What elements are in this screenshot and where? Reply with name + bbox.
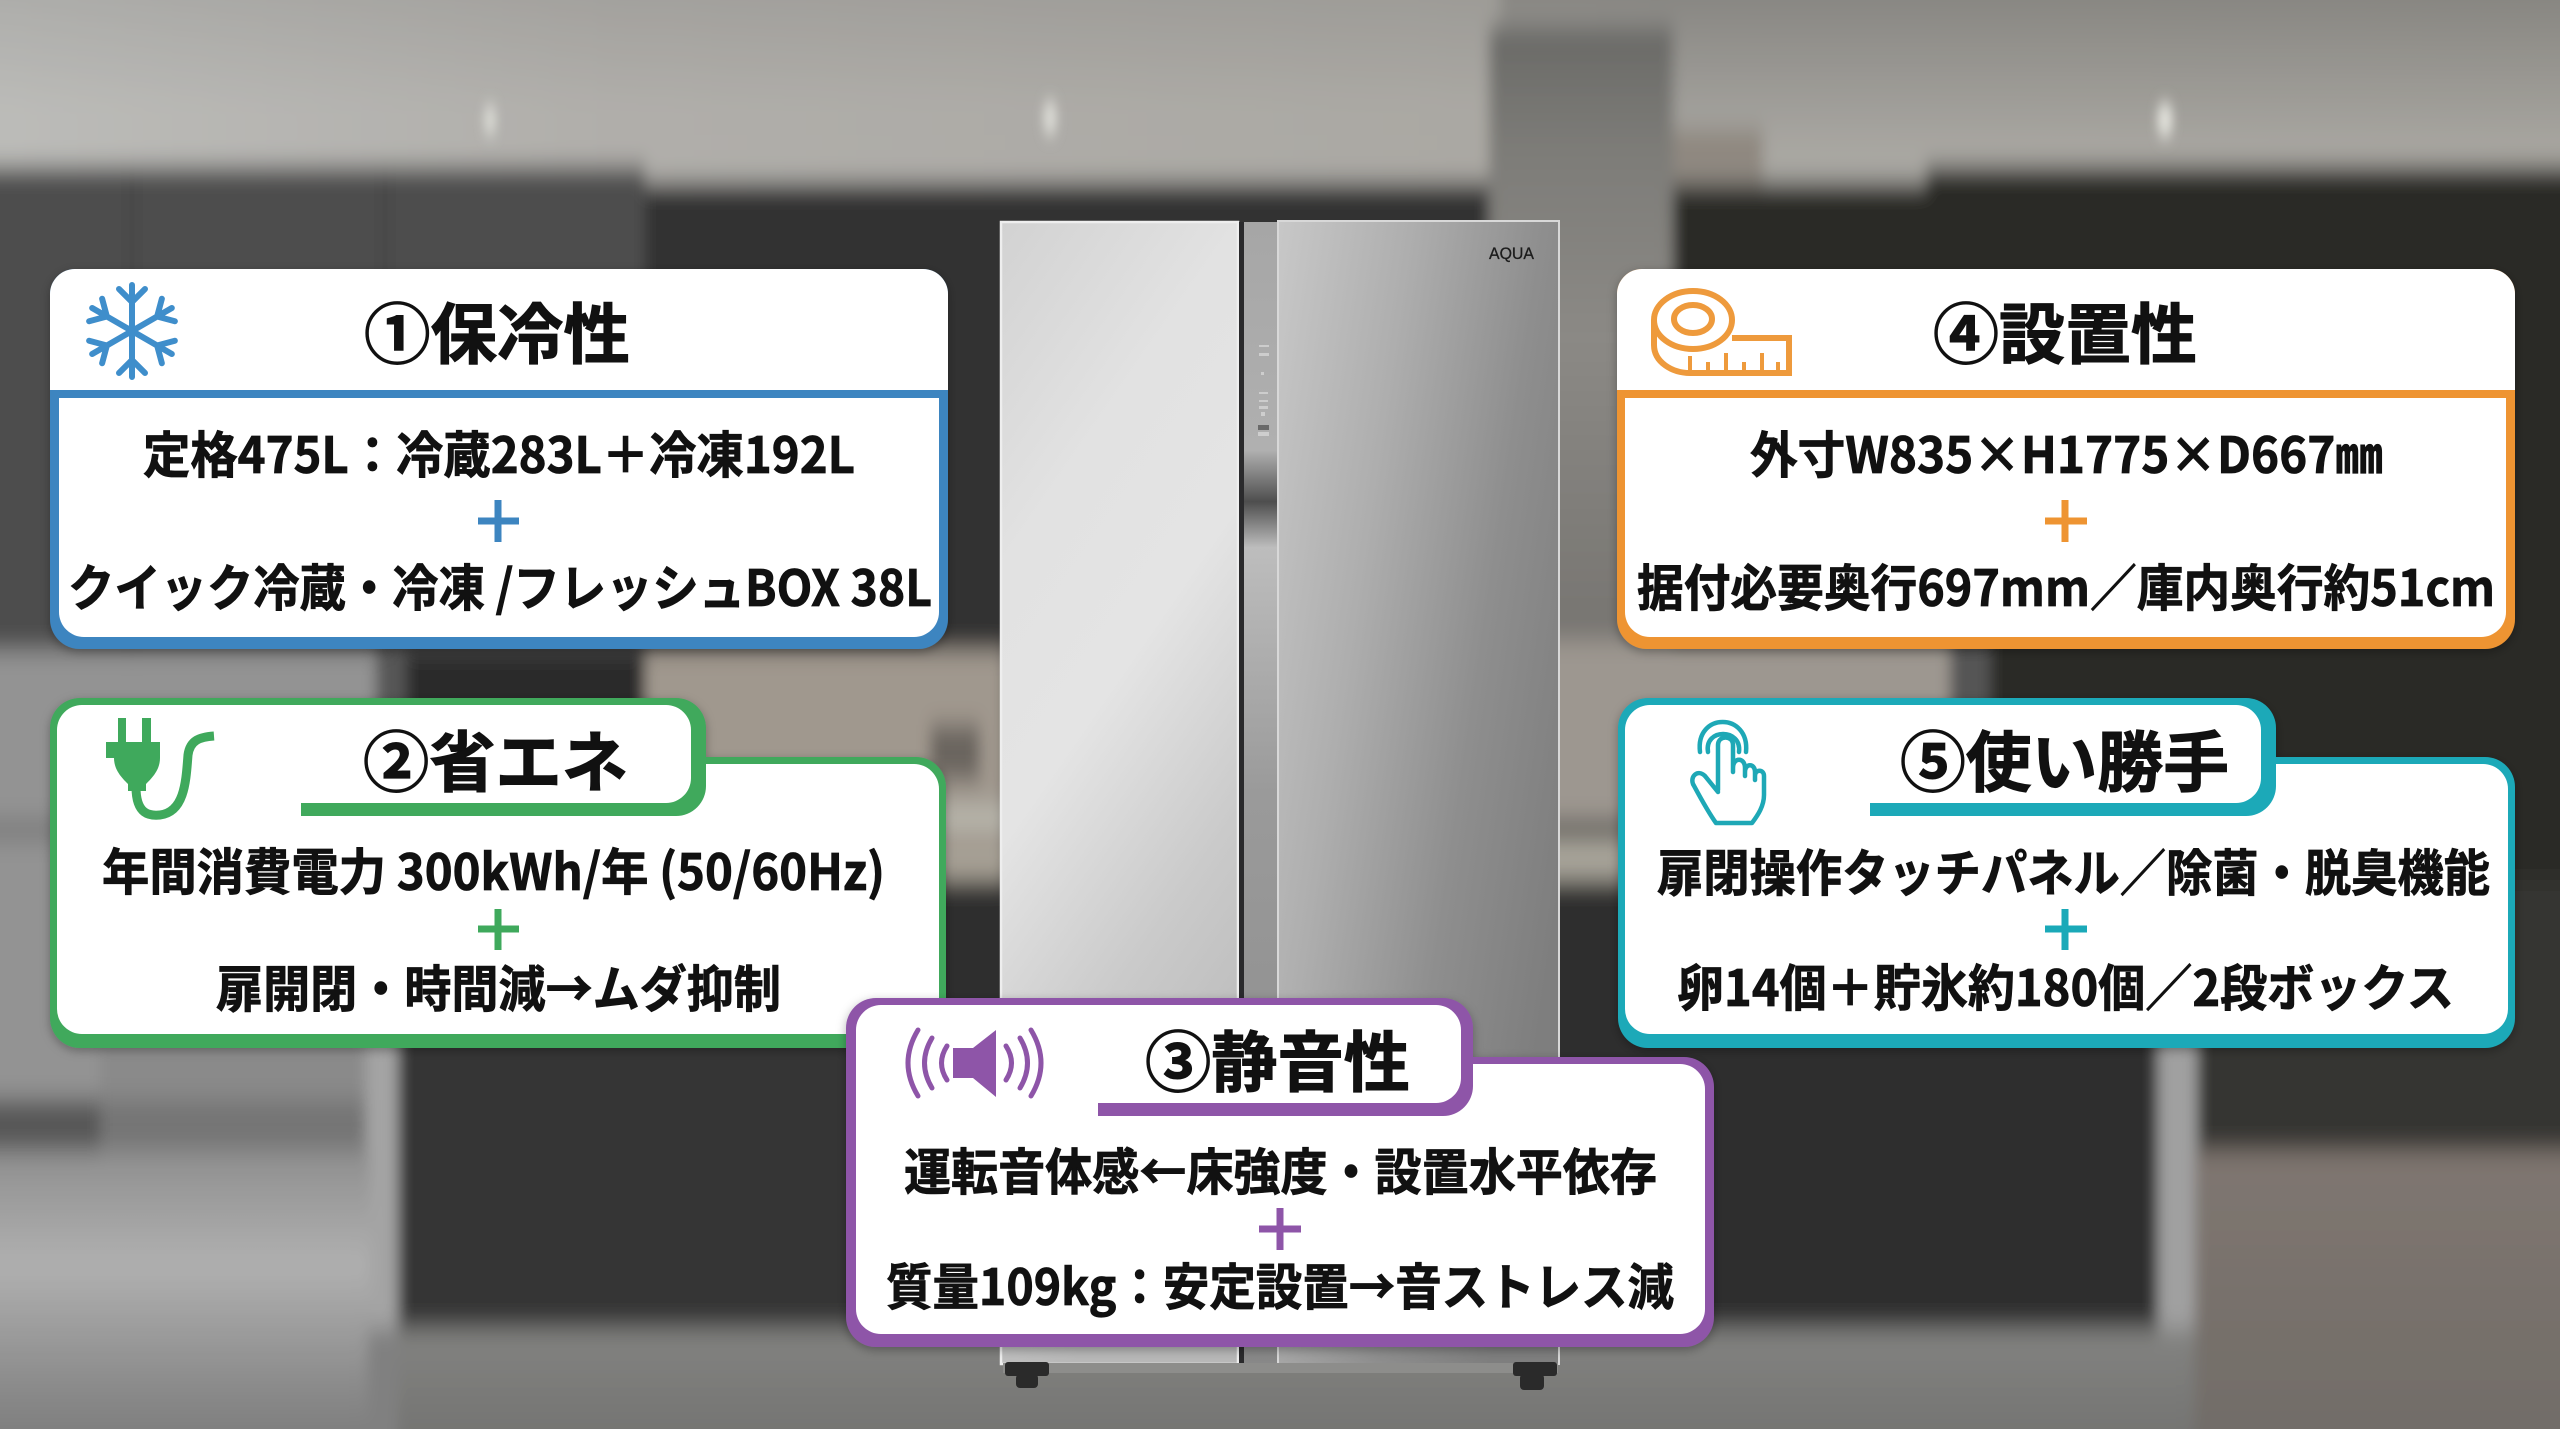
line 2: 質量109kg：安定設置→音ストレス減 [886, 1248, 1674, 1320]
base rail [1003, 1363, 1558, 1373]
icon: speaker [908, 1030, 1041, 1097]
panel frame [1618, 698, 2515, 1048]
icon: snowflake [86, 285, 178, 377]
header background [50, 269, 948, 390]
line 2: 据付必要奥行697mm／庫内奥行約51cm [1637, 549, 2495, 621]
refrigerator [1001, 221, 1559, 1390]
panel interior [856, 1005, 1705, 1334]
heading: ②省エネ [363, 710, 628, 806]
panel 3: 静音性 [846, 998, 1714, 1347]
line 2: クイック冷蔵・冷凍 /フレッシュBOX 38L [68, 549, 932, 621]
panel frame [846, 998, 1714, 1347]
touch display [1258, 345, 1269, 436]
panel 2: 省エネ [50, 698, 946, 1048]
header background [1617, 269, 2515, 390]
left door [1001, 222, 1238, 1364]
right caster [1513, 1362, 1557, 1390]
heading: ③静音性 [1145, 1010, 1410, 1106]
line 1: 年間消費電力 300kWh/年 (50/60Hz) [102, 833, 885, 905]
brand logo: AQUA [1489, 244, 1535, 263]
heading: ⑤使い勝手 [1900, 710, 2229, 806]
panel interior [1625, 705, 2508, 1034]
plus [2045, 909, 2087, 950]
panel frame [50, 269, 948, 649]
panel frame [50, 698, 946, 1048]
panel 5: 使い勝手 [1618, 698, 2515, 1048]
line 2: 卵14個＋貯氷約180個／2段ボックス [1677, 949, 2454, 1021]
panel 1: 保冷性 [50, 269, 948, 649]
plus [478, 909, 519, 950]
plus [1259, 1208, 1301, 1250]
icon: touch hand [1692, 722, 1764, 823]
line 1: 定格475L：冷蔵283L＋冷凍192L [143, 416, 855, 488]
icon: plug [106, 718, 214, 815]
line 1: 外寸W835×H1775×D667㎜ [1750, 416, 2383, 488]
line 2: 扉開閉・時間減→ムダ抑制 [216, 950, 781, 1022]
plus [478, 500, 519, 542]
heading: ④設置性 [1933, 282, 2197, 378]
plus [2045, 500, 2087, 542]
body background [1625, 398, 2506, 637]
left caster [1005, 1362, 1049, 1388]
heading: ①保冷性 [364, 282, 630, 378]
right door [1278, 221, 1559, 1364]
line 1: 扉閉操作タッチパネル／除菌・脱臭機能 [1657, 834, 2490, 906]
icon: measuring tape [1654, 291, 1789, 373]
body background [59, 398, 939, 637]
door gap [1239, 222, 1244, 1364]
center panel [1243, 222, 1277, 1364]
line 1: 運転音体感←床強度・設置水平依存 [904, 1133, 1657, 1205]
panel frame [1617, 269, 2515, 649]
ceiling lights [484, 100, 2173, 138]
panel 4: 設置性 [1617, 269, 2515, 649]
panel interior [57, 705, 939, 1034]
